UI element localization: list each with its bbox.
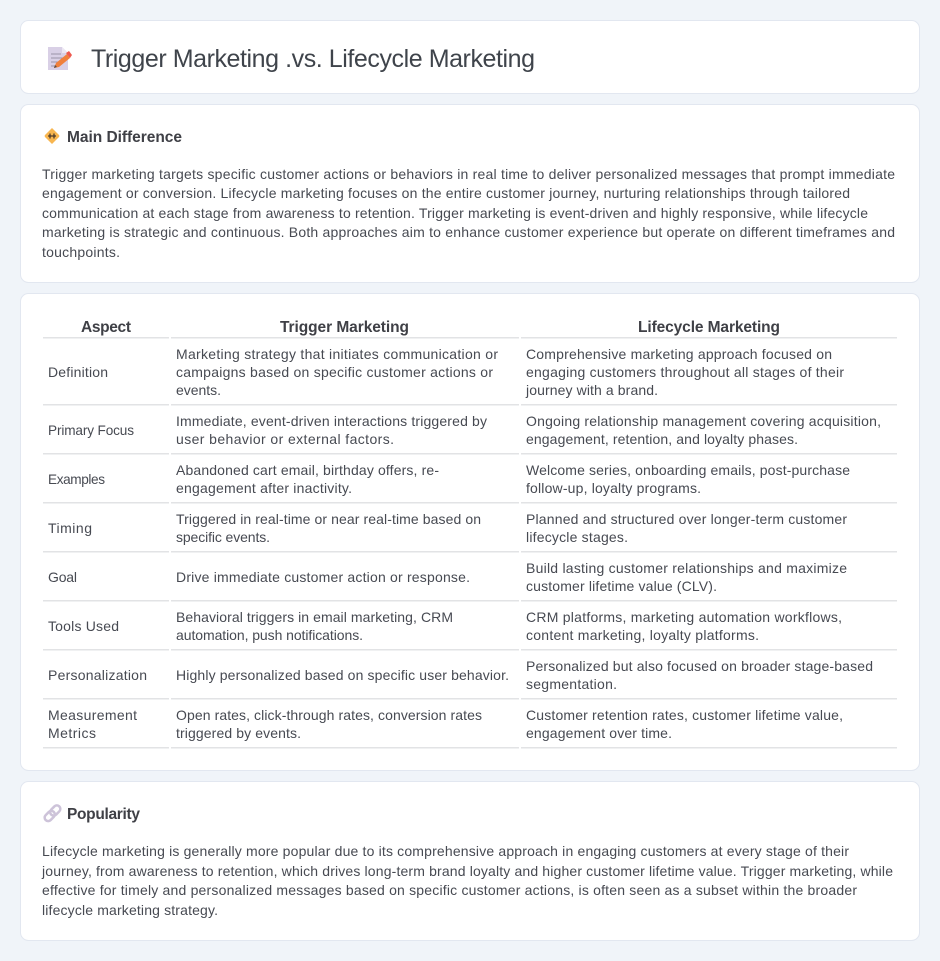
table row: goal: customer lifetime value (CLV). xyxy=(526,578,717,594)
table row: definition: journey with a brand. xyxy=(525,382,658,398)
table row: goal xyxy=(43,560,897,602)
table header row: Aspect xyxy=(81,319,131,336)
title: Trigger Marketing .vs. Lifecycle Marketing xyxy=(91,45,535,73)
icon: document with pencil xyxy=(48,47,72,70)
table row: personalization: Personalization xyxy=(48,667,147,683)
text block: popularity: lifecycle marketing strategy. xyxy=(42,902,218,918)
table row: primary focus: Primary Focus xyxy=(48,423,134,438)
table header row xyxy=(43,319,897,338)
table row: examples: Welcome series, onboarding emails, post-purchase xyxy=(526,462,850,478)
text block: main difference: Trigger marketing targets specific customer actions or behaviors in real time to deliver personalized messages that prompt immediate xyxy=(42,166,895,182)
table row: measurement metrics: Measurement xyxy=(48,707,137,723)
table row: definition: Marketing strategy that initiates communication or xyxy=(176,346,498,362)
text block: popularity: effective for timely and personalized messages based on specific customer actions, is often seen as a subset within the broader xyxy=(42,882,857,898)
icon: warning diamond xyxy=(45,128,59,144)
table row: measurement metrics: triggered by events. xyxy=(176,725,301,741)
table row: goal: Goal xyxy=(48,569,77,585)
table row: definition: Definition xyxy=(48,364,108,380)
text block: main difference: communication at each stage from awareness to retention. Trigger marketing is event-driven and highly responsive, while lifecycle xyxy=(42,205,868,221)
table row: tools used: content marketing, loyalty platforms. xyxy=(526,627,759,643)
table row: personalization: segmentation. xyxy=(526,676,617,692)
panel: comparison table xyxy=(20,294,920,770)
text block: main difference: engagement or conversion. Lifecycle marketing focuses on the entire customer journey, nurturing relationships through tailored xyxy=(42,185,850,201)
table row: timing: Triggered in real-time or near real-time based on xyxy=(176,511,481,527)
table row: timing: lifecycle stages. xyxy=(526,529,628,545)
table row: examples: engagement after inactivity. xyxy=(176,480,352,496)
table header row: Trigger Marketing xyxy=(280,319,409,336)
table row: tools used: Tools Used xyxy=(48,618,119,634)
table row: goal: Build lasting customer relationships and maximize xyxy=(526,560,847,576)
text block: main difference: touchpoints. xyxy=(42,244,120,260)
table row: examples: Abandoned cart email, birthday offers, re- xyxy=(176,462,439,478)
table row: definition: Comprehensive marketing approach focused on xyxy=(526,346,832,362)
table row: examples: Examples xyxy=(48,472,105,487)
table row: definition: engaging customers throughout all stages of their xyxy=(526,364,844,380)
table row: definition xyxy=(43,346,897,406)
table row: personalization: Personalized but also focused on broader stage-based xyxy=(526,658,873,674)
panel: title header xyxy=(20,20,920,94)
table row: timing: Timing xyxy=(48,520,92,536)
panel: main difference xyxy=(20,104,920,282)
panel: popularity xyxy=(20,782,920,940)
table row: primary focus: Ongoing relationship management covering acquisition, xyxy=(526,413,881,429)
table row: measurement metrics: Metrics xyxy=(48,725,96,741)
table row: timing: specific events. xyxy=(176,529,270,545)
icon: chain link xyxy=(43,804,62,823)
table row: measurement metrics: engagement over time. xyxy=(526,725,672,741)
table row: tools used: Behavioral triggers in email marketing, CRM xyxy=(176,609,453,625)
text block: popularity xyxy=(41,843,893,918)
table row: personalization: Highly personalized based on specific user behavior. xyxy=(176,667,509,683)
table row: measurement metrics: Customer retention rates, customer lifetime value, xyxy=(526,707,843,723)
text block: popularity: Lifecycle marketing is generally more popular due to its comprehensive approach in engaging customers at every stage of their xyxy=(42,843,849,859)
text block: main difference: marketing is strategic and continuous. Both approaches aim to enhance customer experience but operate on different timeframes and xyxy=(42,224,895,240)
table row: examples xyxy=(43,462,897,504)
table row: primary focus: user behavior or external factors. xyxy=(176,431,394,447)
table row: tools used: CRM platforms, marketing automation workflows, xyxy=(526,609,842,625)
table row: definition: events. xyxy=(176,382,221,398)
table row: personalization xyxy=(43,658,897,700)
table row: timing: Planned and structured over longer-term customer xyxy=(526,511,847,527)
table row: measurement metrics: Open rates, click-through rates, conversion rates xyxy=(176,707,482,723)
table row: timing xyxy=(43,511,897,552)
table row: tools used: automation, push notifications. xyxy=(176,627,363,643)
table row: primary focus xyxy=(43,413,897,454)
text block: popularity: journey, from awareness to retention, which drives long-term brand loyalty and higher customer lifetime value. Trigger marketing, while xyxy=(41,863,893,879)
table row: measurement metrics xyxy=(43,707,897,748)
table row: primary focus: Immediate, event-driven interactions triggered by xyxy=(176,413,487,429)
heading: popularity: Popularity xyxy=(67,806,140,823)
table row: primary focus: engagement, retention, and loyalty phases. xyxy=(526,431,798,447)
table row: tools used xyxy=(43,609,897,650)
table header row: Lifecycle Marketing xyxy=(638,319,780,336)
text block: main difference xyxy=(42,166,895,260)
table row: definition: campaigns based on specific customer actions or xyxy=(176,364,493,380)
table row: goal: Drive immediate customer action or response. xyxy=(176,569,470,585)
table row: examples: follow-up, loyalty programs. xyxy=(526,480,701,496)
heading: main difference: Main Difference xyxy=(67,129,182,146)
